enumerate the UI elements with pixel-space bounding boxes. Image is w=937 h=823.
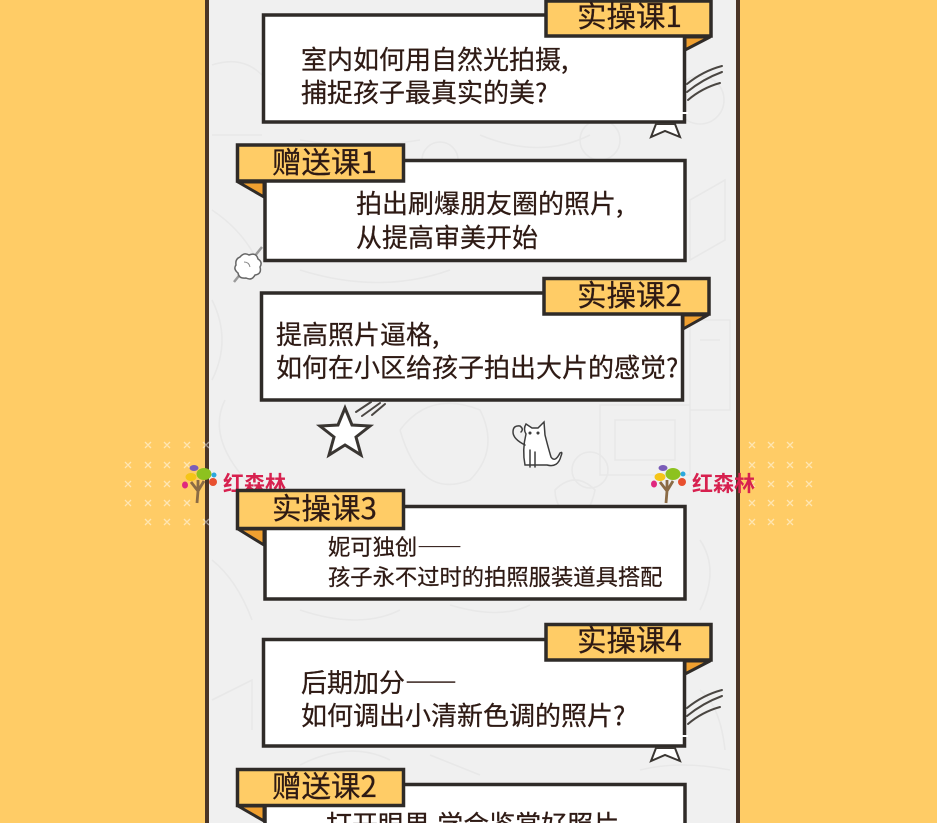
card: 实操课1: 捕捉孩子最真实的美? xyxy=(301,73,547,110)
card: 实操课3: 孩子永不过时的拍照服装道具搭配 xyxy=(328,560,662,592)
card: 实操课4: 实操课4 xyxy=(577,618,682,660)
card: 实操课3: 妮可独创—— xyxy=(328,530,462,562)
icon: cat doodle xyxy=(513,422,562,467)
card: 赠送课2 xyxy=(238,764,685,823)
card: 实操课3 xyxy=(238,486,685,599)
logo: left brand name: 红森林 xyxy=(223,468,286,498)
card: 实操课2: 实操课2 xyxy=(577,273,682,315)
card: 实操课4: 如何调出小清新色调的照片? xyxy=(301,696,625,733)
card: 赠送课2: 赠送课2 xyxy=(272,764,377,806)
card: 赠送课1 xyxy=(238,140,685,260)
icon: shooting star xyxy=(320,402,385,455)
card: 实操课1 xyxy=(264,0,711,122)
card: 赠送课1: 从提高审美开始 xyxy=(356,218,538,255)
card: 实操课2 xyxy=(262,273,709,400)
card: 实操课2: 提高照片逼格, xyxy=(276,315,439,352)
card: 实操课1: 室内如何用自然光拍摄, xyxy=(301,40,568,77)
icon: flower doodle xyxy=(234,247,262,282)
central panel xyxy=(207,0,738,823)
card: 实操课3: 实操课3 xyxy=(272,486,377,528)
watermark crosses left xyxy=(125,442,209,525)
watermark crosses right xyxy=(749,442,812,525)
card: 实操课4 xyxy=(264,618,711,746)
card: 实操课4: 后期加分—— xyxy=(301,663,457,700)
icon: shooting star behind card 1 xyxy=(643,66,722,137)
card: 实操课2: 如何在小区给孩子拍出大片的感觉? xyxy=(276,348,678,385)
logo: right tree xyxy=(651,465,686,503)
doodle background pattern xyxy=(212,62,730,775)
card: 赠送课1: 拍出刷爆朋友圈的照片, xyxy=(356,184,623,221)
logo: left tree xyxy=(182,465,217,503)
card: 赠送课1: 赠送课1 xyxy=(272,140,377,182)
logo: right brand name: 红森林 xyxy=(692,468,755,498)
icon: shooting star behind card 4 xyxy=(643,690,722,761)
